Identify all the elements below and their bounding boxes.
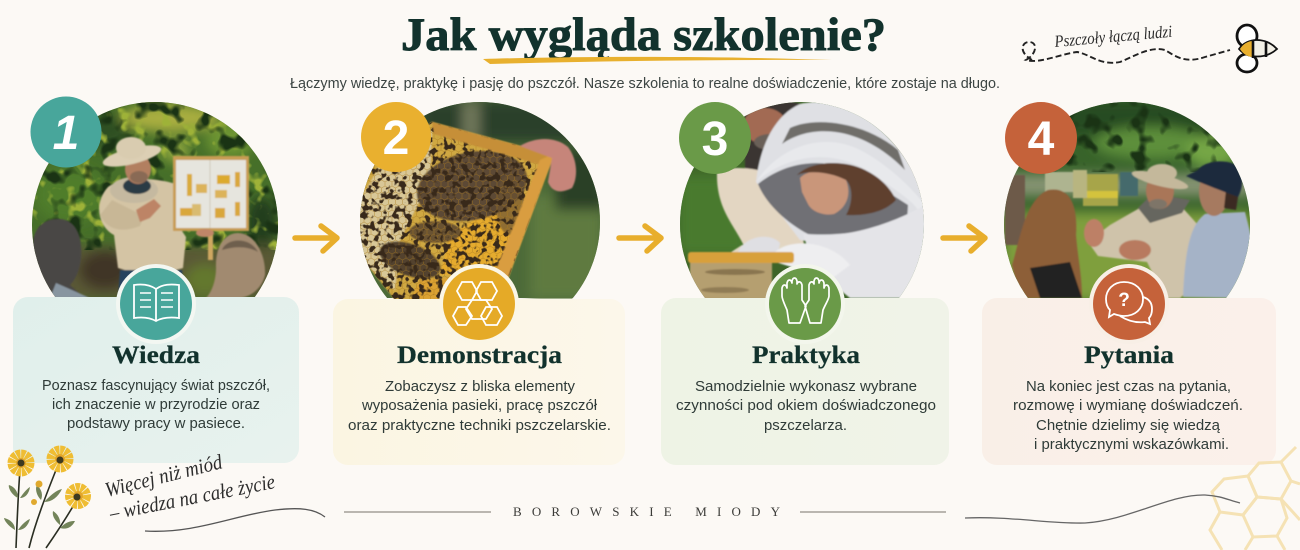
- step 2: [333, 100, 625, 465]
- body text: wyposażenia pasieki, pracę pszczół: [361, 398, 598, 414]
- heading: Praktyka: [752, 342, 861, 369]
- icon: open book: [116, 264, 196, 344]
- board: [173, 156, 249, 231]
- face and hat: [125, 154, 151, 184]
- icon: bee: [1237, 25, 1277, 72]
- decoration: bee flight: [1023, 22, 1277, 72]
- number badge 1: [30, 96, 102, 168]
- body text: ich znaczenie w przyrodzie oraz: [52, 397, 260, 413]
- number badge 4: [1005, 102, 1077, 174]
- step 4: [982, 100, 1276, 465]
- number badge 3: [679, 102, 751, 174]
- arrow 3: [943, 226, 985, 251]
- body: [99, 179, 186, 272]
- body text: pszczelarza.: [764, 418, 847, 434]
- body text: Poznasz fascynujący świat pszczół,: [42, 378, 270, 394]
- card 4: [982, 298, 1276, 465]
- heading: Demonstracja: [397, 342, 563, 369]
- heading: Pytania: [1084, 342, 1175, 369]
- body text: [348, 379, 611, 434]
- handwritten note: [102, 449, 325, 531]
- number badge 1: 1: [53, 107, 79, 160]
- photo: child in beekeeping suit: [678, 100, 930, 299]
- gloves: [738, 236, 780, 253]
- handwritten slogan: Pszczoły łączą ludzi: [1053, 22, 1173, 51]
- face and hair: [800, 171, 848, 215]
- step 1: [13, 96, 299, 463]
- footer brand: BOROWSKIE MIODY: [513, 504, 781, 519]
- step 3: [661, 100, 949, 465]
- body text: Na koniec jest czas na pytania,: [1026, 379, 1231, 395]
- icon: speech bubbles with question mark: ?: [1118, 290, 1130, 311]
- arrow 1: [295, 226, 337, 251]
- body text: [42, 378, 270, 432]
- photo: conversation in the apiary: [1003, 100, 1253, 302]
- body text: [676, 379, 936, 434]
- handwritten note: Więcej niż miód: [102, 449, 225, 502]
- decoration: honeycomb: [1210, 447, 1300, 550]
- body text: podstawy pracy w pasiece.: [67, 416, 245, 432]
- body text: oraz praktyczne techniki pszczelarskie.: [348, 418, 611, 434]
- body text: Samodzielnie wykonasz wybrane: [695, 379, 917, 395]
- icon: speech bubbles with question mark: [1089, 264, 1169, 344]
- decoration: yellow flowers: [4, 450, 86, 548]
- title: Jak wygląda szkolenie?: [401, 9, 886, 61]
- photo: honeycomb frame with bees: [355, 100, 605, 300]
- card 3: [661, 298, 949, 465]
- arrow 2: [619, 226, 661, 251]
- number badge 2: [361, 102, 431, 172]
- frame: [688, 252, 794, 263]
- body text: i praktycznymi wskazówkami.: [1034, 437, 1229, 453]
- number badge 2: 2: [383, 112, 409, 165]
- icon: gloves: [765, 264, 845, 344]
- dashed flight path: [1023, 42, 1230, 63]
- photo: beekeeper presenting a board: [30, 100, 280, 300]
- number badge 3: 3: [702, 113, 728, 166]
- decoration: swoosh: [965, 495, 1240, 523]
- hood: [756, 102, 926, 250]
- card 1: [13, 297, 299, 463]
- body text: Zobaczysz z bliska elementy: [385, 379, 576, 395]
- body text: [1013, 379, 1243, 453]
- subtitle: Łączymy wiedzę, praktykę i pasję do pszczół. Nasze szkolenia to realne doświadczenie, które zostaje na długo.: [290, 76, 1000, 92]
- icon: honeycomb: [439, 264, 519, 344]
- heading: Wiedza: [112, 342, 201, 369]
- heads: [33, 218, 82, 293]
- body text: czynności pod okiem doświadczonego: [676, 398, 936, 414]
- body text: rozmowę i wymianę doświadczeń.: [1013, 398, 1243, 414]
- body text: Chętnie dzielimy się wiedzą: [1036, 418, 1221, 434]
- handwritten note: – wiedza na całe życie: [106, 469, 277, 525]
- number badge 4: 4: [1028, 113, 1055, 166]
- card 2: [333, 299, 625, 465]
